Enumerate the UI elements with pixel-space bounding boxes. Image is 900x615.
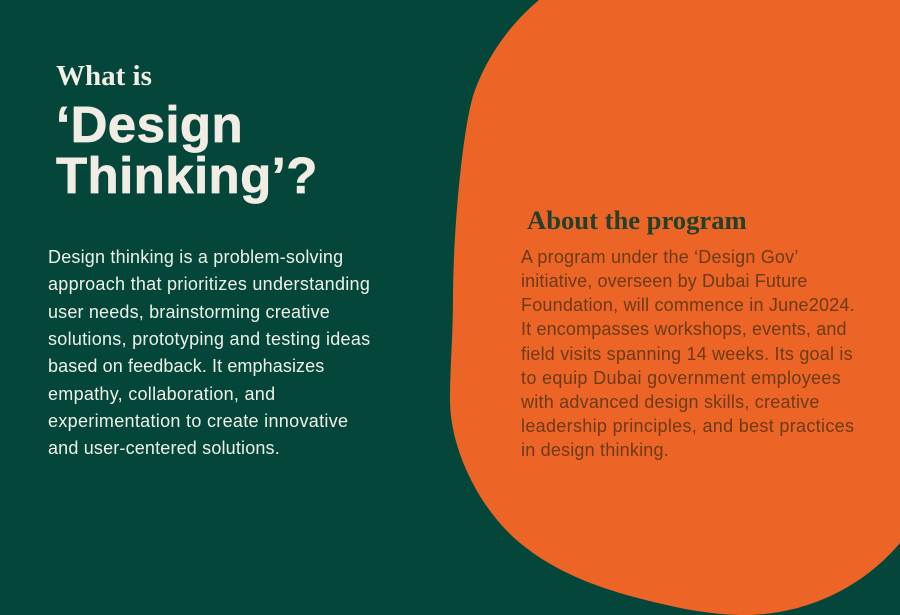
text block: design thinking definition: Design thinking is a problem-solving [48, 247, 343, 267]
text block: design thinking definition: experimentation to create innovative [48, 411, 348, 431]
text block: design thinking definition: and user-centered solutions. [48, 438, 280, 458]
text block: design thinking definition: empathy, collaboration, and [48, 384, 275, 404]
heading: Design Thinking: ‘Design [56, 96, 243, 153]
heading: What is: What is [56, 60, 152, 92]
text block: program description: in design thinking. [521, 440, 669, 460]
text block: program description: A program under the ‘Design Gov’ [521, 247, 799, 267]
text block: design thinking definition: based on feedback. It emphasizes [48, 356, 324, 376]
text block: program description: to equip Dubai government employees [521, 368, 841, 388]
heading: About the program: About the program [527, 205, 747, 235]
text block: program description: field visits spanning 14 weeks. Its goal is [521, 344, 853, 364]
text block: design thinking definition: solutions, prototyping and testing ideas [48, 329, 370, 349]
heading: Design Thinking: Thinking’? [56, 147, 318, 204]
text block: program description: with advanced design skills, creative [521, 392, 820, 412]
text block: design thinking definition [48, 247, 370, 458]
text block: program description [521, 247, 855, 460]
text block: program description: It encompasses workshops, events, and [521, 319, 847, 339]
text block: program description: Foundation, will commence in June2024. [521, 295, 855, 315]
text block: program description: initiative, overseen by Dubai Future [521, 271, 807, 291]
text block: program description: leadership principles, and best practices [521, 416, 854, 436]
heading: Design Thinking [56, 96, 318, 204]
text block: design thinking definition: approach that prioritizes understanding [48, 274, 370, 294]
text block: design thinking definition: user needs, brainstorming creative [48, 302, 330, 322]
